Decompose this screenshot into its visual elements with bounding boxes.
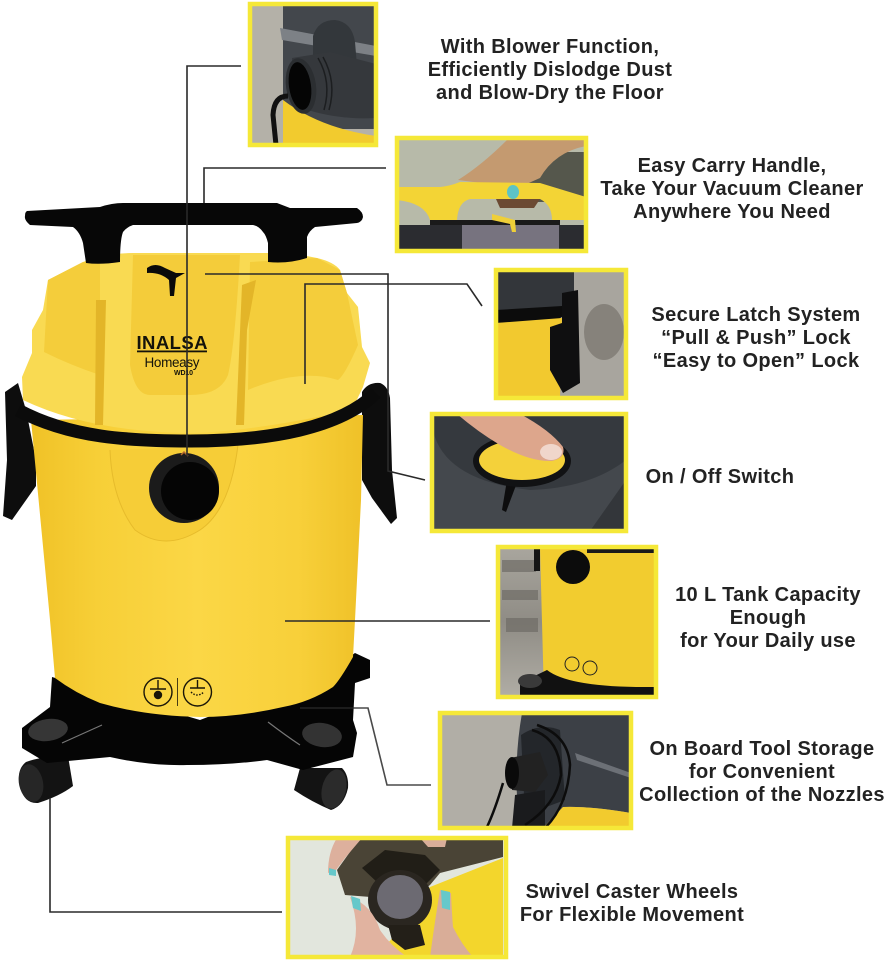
text: carry handle: Take Your Vacuum Cleaner: [600, 178, 864, 200]
text: latch system: “Pull & Push” Lock: [661, 327, 851, 349]
text: blower function: With Blower Function,: [441, 36, 659, 58]
text: on off switch: On / Off Switch: [646, 466, 794, 488]
text: tank capacity: Enough: [730, 607, 806, 629]
lid: [22, 253, 370, 433]
leader line: tool storage: [300, 708, 431, 785]
brand logo: INALSA: [136, 332, 208, 353]
carry handle: [25, 203, 363, 264]
text: latch system: “Easy to Open” Lock: [653, 350, 860, 372]
leader line: tank: [285, 620, 490, 622]
clamp band: [18, 393, 376, 441]
leader line: handle: [204, 168, 386, 203]
right latch: [362, 383, 397, 524]
safety icons: [144, 678, 212, 706]
brand logo: [136, 332, 208, 377]
text: latch system: Secure Latch System: [651, 304, 861, 326]
nozzle recess outline: [110, 445, 238, 541]
text: tank capacity: 10 L Tank Capacity: [675, 584, 861, 606]
photo: blower nozzle: [250, 4, 376, 145]
left latch: [3, 383, 36, 520]
text: tool storage: for Convenient: [689, 761, 835, 783]
text: caster wheels: Swivel Caster Wheels: [526, 881, 738, 903]
text: tank capacity: for Your Daily use: [680, 630, 856, 652]
text: caster wheels: For Flexible Movement: [520, 904, 744, 926]
photo: latch system: [496, 270, 626, 398]
photo: caster wheels: [288, 838, 506, 957]
yellow tank: [31, 415, 363, 717]
brand logo: WD10: [174, 370, 193, 377]
base wheel covers: [27, 716, 343, 750]
text: tool storage: Collection of the Nozzles: [639, 784, 885, 806]
text: carry handle: Easy Carry Handle,: [638, 155, 826, 177]
photo: tool storage: [440, 713, 631, 828]
leader line: latch: [305, 284, 482, 384]
blower nozzle: [149, 452, 219, 523]
text: carry handle: Anywhere You Need: [633, 201, 831, 223]
lid power switch: [147, 265, 185, 296]
leader line: switch: [205, 274, 425, 480]
leader line: blower: [187, 66, 241, 456]
black base: [22, 653, 370, 770]
text: blower function: and Blow-Dry the Floor: [436, 82, 664, 104]
text: blower function: Efficiently Dislodge Dust: [428, 59, 672, 81]
vacuum cleaner illustration: [3, 203, 397, 811]
caster wheels: [15, 756, 350, 811]
photo: on/off switch: [432, 414, 626, 531]
text: tool storage: On Board Tool Storage: [650, 738, 874, 760]
photo: tank capacity: [498, 547, 656, 697]
photo: carry handle: [397, 138, 586, 251]
brand logo: Homeasy: [144, 355, 200, 370]
leader line: casters: [50, 798, 282, 912]
lid darker panels: [44, 255, 358, 425]
